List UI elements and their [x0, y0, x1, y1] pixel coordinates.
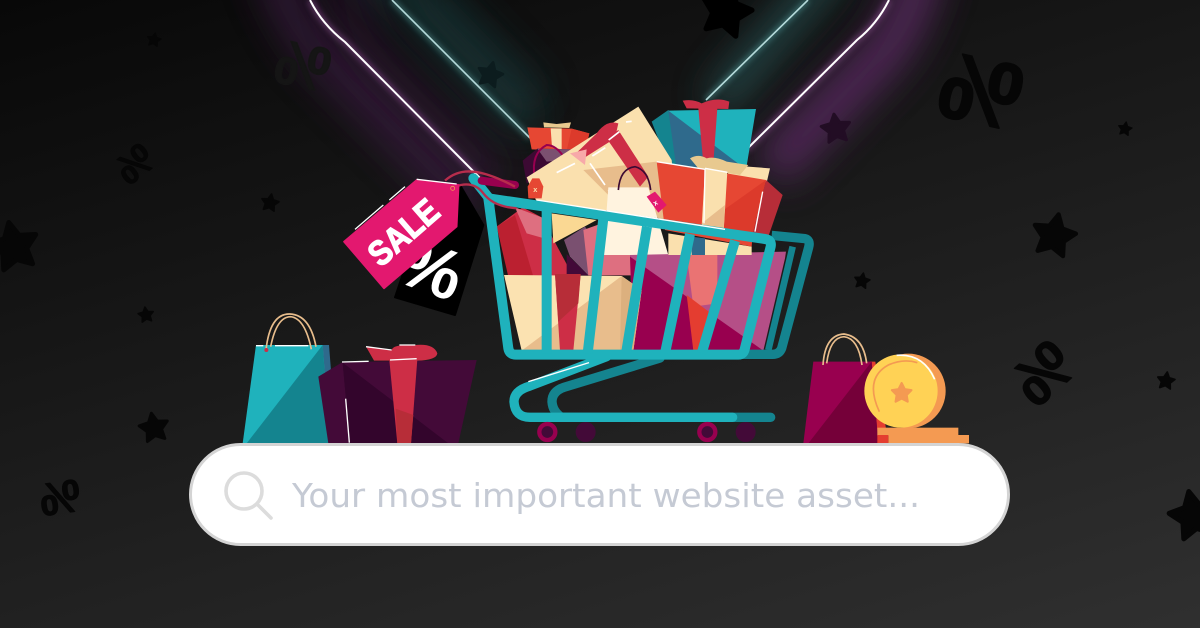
black percent tag — [389, 185, 483, 316]
teal gift — [652, 100, 756, 177]
big cream gift — [527, 107, 677, 223]
small red price tags: x — [651, 197, 660, 208]
rear rail — [552, 358, 771, 417]
coin stack — [877, 428, 969, 443]
cart handle — [482, 181, 725, 229]
cream bag — [603, 167, 668, 255]
small red gift — [527, 122, 589, 151]
gold coin — [864, 354, 946, 428]
black percent tag: % — [389, 221, 474, 316]
background percent signs: % — [930, 31, 1032, 151]
background percent signs: % — [36, 469, 84, 526]
dark purple gift — [318, 345, 477, 443]
search placeholder text: Your most important website asset... — [291, 476, 920, 515]
dark shopping bag — [523, 145, 571, 183]
icon: magnifying glass — [226, 473, 271, 518]
front rail — [514, 357, 733, 417]
shopping cart with gifts — [344, 100, 809, 355]
cart back bars — [768, 247, 793, 350]
pink sale tag — [344, 171, 517, 288]
cart base rails and wheels — [514, 357, 771, 442]
background percent signs — [36, 27, 1089, 526]
left bag and gift — [243, 314, 477, 443]
cart contents lower gifts — [497, 207, 786, 351]
neon light beams — [270, 0, 925, 205]
background percent signs: % — [105, 134, 164, 194]
cart back frame — [740, 235, 809, 354]
search bar — [190, 444, 1008, 544]
background percent signs: % — [996, 326, 1089, 420]
lower cream box in cart — [504, 274, 642, 351]
cart front frame — [473, 178, 771, 355]
small red price tags: x — [533, 185, 538, 194]
orange red gift — [657, 156, 783, 247]
small red price tags — [528, 178, 667, 213]
background percent signs: % — [269, 27, 337, 106]
right bag and coin — [803, 334, 969, 443]
wheels — [539, 422, 756, 442]
search bar box — [190, 444, 1008, 544]
rail highlight — [528, 363, 589, 382]
teal shopping bag — [243, 314, 337, 443]
pink sale tag: SALE — [360, 191, 447, 274]
magenta shopping bag — [803, 334, 888, 443]
